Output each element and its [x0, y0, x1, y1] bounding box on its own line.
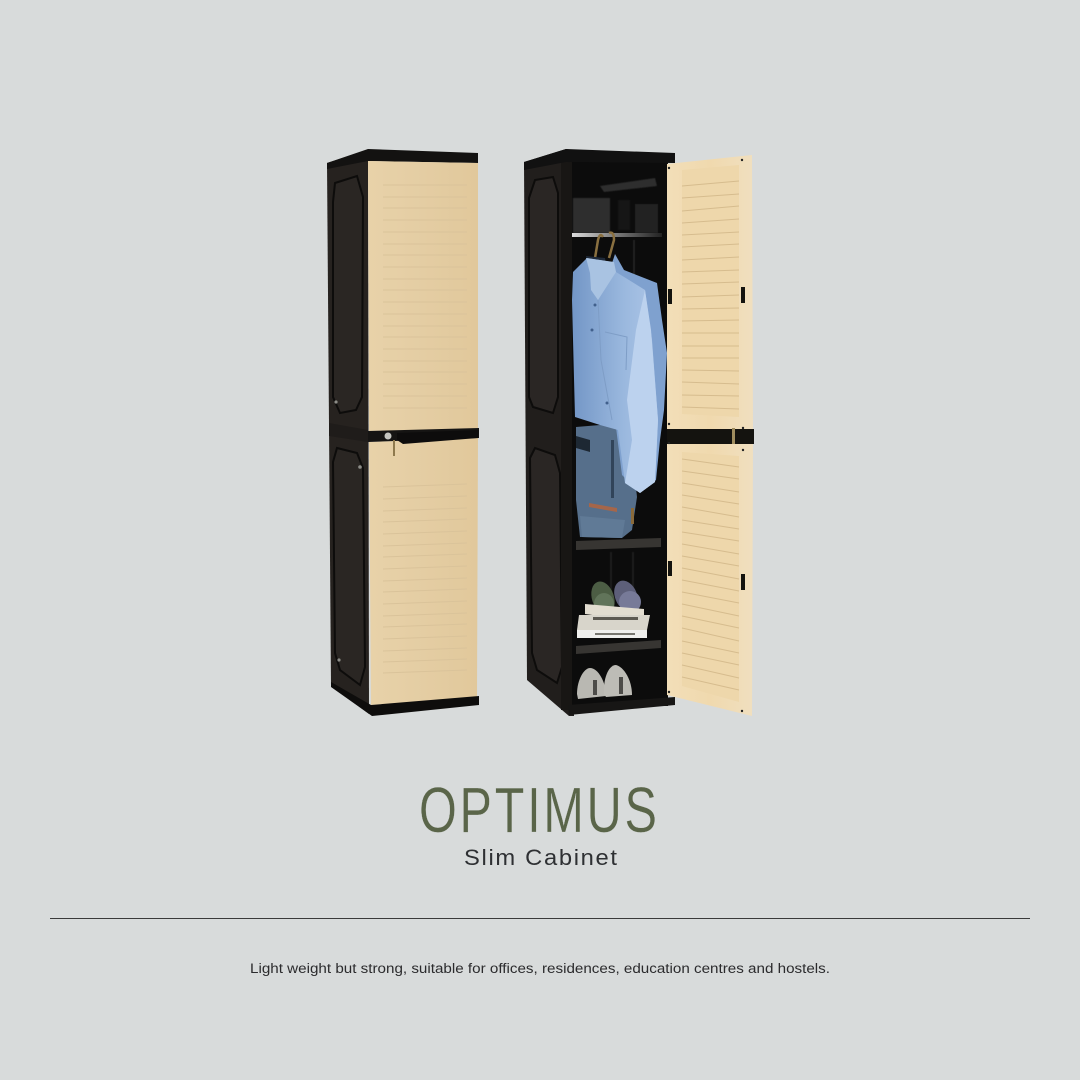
- cabinet interior: [572, 161, 668, 706]
- front sleeve: [625, 290, 658, 493]
- shirt collar: [586, 258, 616, 300]
- hangers: [595, 233, 614, 258]
- interior back panels: [573, 178, 658, 602]
- handle: [397, 430, 479, 444]
- cabinet side panel: [327, 150, 369, 714]
- upper inner panel: [682, 165, 739, 417]
- door clips: [668, 287, 745, 590]
- door louvre ribs: [682, 181, 739, 690]
- lower inner panel: [682, 452, 739, 702]
- lower door front: [369, 438, 478, 705]
- product: closed cabinet: [327, 149, 479, 716]
- side upper moulding: [333, 176, 363, 413]
- stacked books: [577, 604, 650, 638]
- side lower moulding: [530, 448, 562, 683]
- hanger dark neck: [586, 256, 606, 265]
- front shirt: [572, 258, 658, 493]
- top lid: [327, 149, 478, 169]
- cabinet side panel: [524, 149, 574, 716]
- description: Light weight but strong, suitable for offices, residences, education centres and hostels.: [250, 961, 830, 976]
- door texture lines: [383, 185, 467, 673]
- upper door front: [368, 161, 478, 431]
- door screws: [668, 159, 744, 712]
- door open: [667, 155, 754, 716]
- base plinth: [331, 682, 479, 716]
- rolled towels: [587, 577, 642, 618]
- side waist band: [329, 423, 368, 442]
- back shirt: [600, 254, 667, 493]
- hanging rod: [572, 233, 662, 237]
- side front edge: [561, 160, 573, 710]
- lower door leaf: [667, 441, 753, 716]
- lock and key: [384, 432, 395, 456]
- side lower moulding: [333, 448, 365, 685]
- divider: [50, 918, 1030, 919]
- side upper moulding: [529, 177, 558, 413]
- door key: [732, 428, 735, 444]
- upper shelf: [576, 538, 661, 550]
- shoes: [577, 665, 632, 699]
- top lid: [524, 149, 675, 170]
- product: open cabinet: [524, 149, 754, 716]
- upper door leaf: [667, 155, 753, 431]
- waist strap: [368, 428, 479, 442]
- backpack: [576, 424, 637, 538]
- title: OPTIMUS: [419, 776, 657, 847]
- subtitle: Slim Cabinet: [464, 845, 618, 870]
- lower shelf: [576, 640, 661, 654]
- door strap: [667, 429, 754, 444]
- base plinth: [568, 697, 675, 715]
- side pin marks: [334, 400, 362, 662]
- shirt pocket and buttons: [590, 300, 627, 420]
